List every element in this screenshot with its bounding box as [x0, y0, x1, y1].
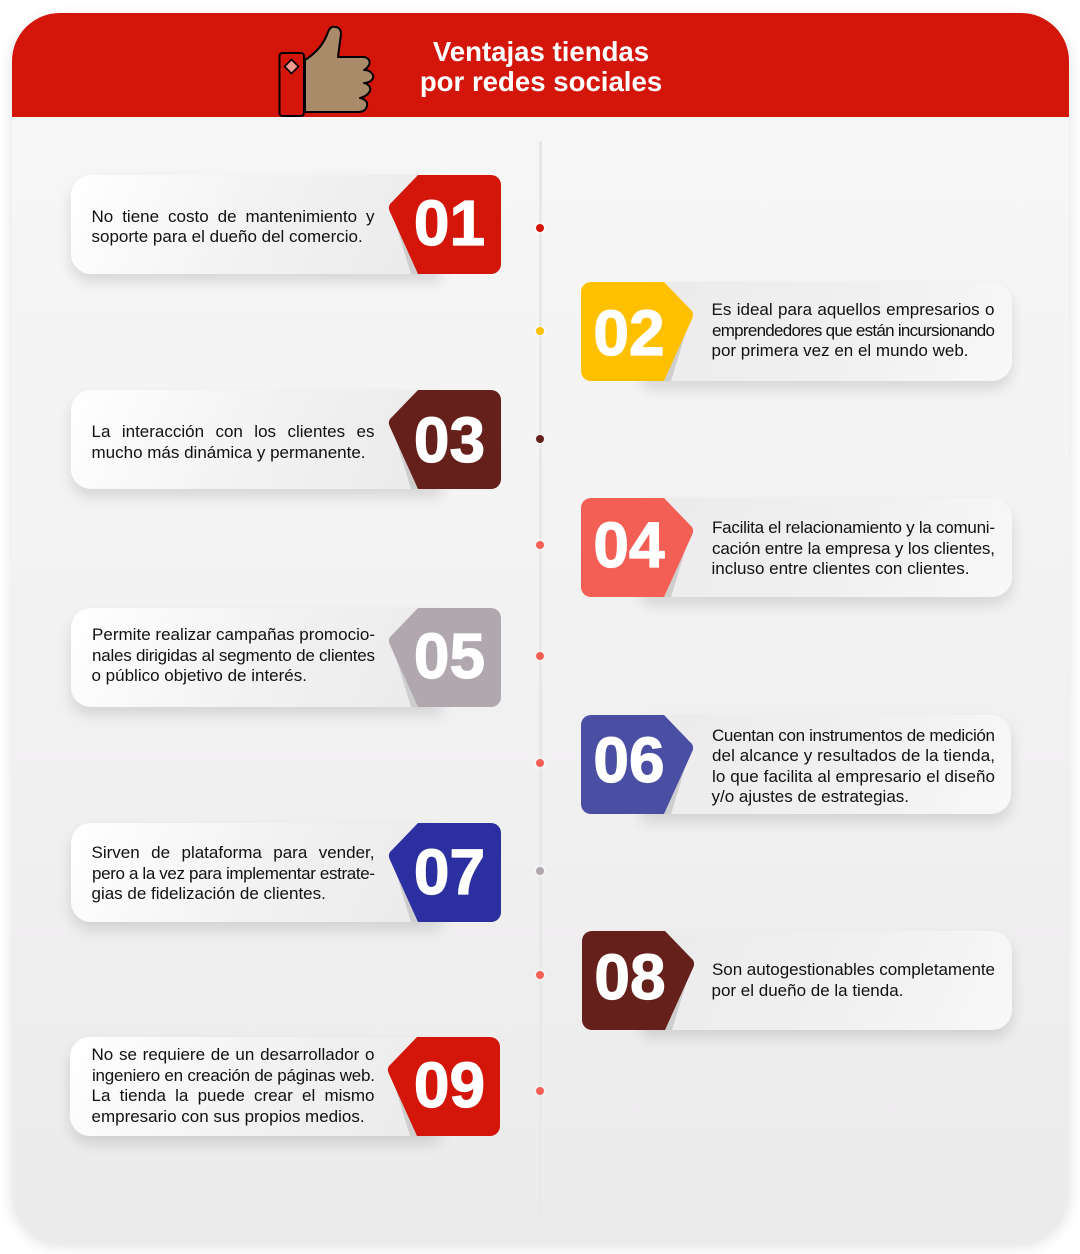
text 08: por el dueño de la tienda. — [712, 980, 903, 1000]
timeline dot 04 — [536, 541, 544, 549]
card 02 — [581, 282, 1016, 393]
card 07 — [67, 823, 501, 934]
timeline dot 09 — [536, 1087, 544, 1095]
card 09 — [66, 1037, 500, 1148]
text 06: Cuentan con instrumentos de medición — [712, 726, 994, 744]
badge 04 — [581, 498, 694, 597]
card 05 — [67, 608, 501, 719]
text 05: nales dirigidas al segmento de clientes — [92, 646, 374, 664]
badge 01 — [388, 175, 501, 274]
timeline dot 05 — [536, 652, 544, 660]
title: Ventajas tiendas — [433, 36, 649, 67]
text 09: ingeniero en creación de páginas web. — [92, 1066, 374, 1084]
card 04 — [581, 498, 1016, 609]
badge 07 — [388, 823, 501, 922]
timeline axis — [539, 141, 542, 1218]
badge 06 — [581, 715, 694, 814]
badge 02 — [581, 282, 694, 381]
number 03: 03 — [414, 404, 485, 476]
text 06 — [712, 726, 994, 806]
badge 05 — [388, 608, 501, 707]
text 02: por primera vez en el mundo web. — [712, 341, 969, 360]
timeline dot 01 — [536, 224, 544, 232]
header band — [12, 13, 1069, 117]
text 04: Facilita el relacionamiento y la comuni- — [712, 518, 994, 537]
text 06: del alcance y resultados de la tienda, — [712, 746, 994, 765]
text 07: gias de fidelización de clientes. — [92, 884, 326, 903]
text 01: soporte para el dueño del comercio. — [92, 227, 363, 246]
text 03: mucho más dinámica y permanente. — [92, 442, 366, 462]
badge 08 — [582, 931, 694, 1030]
text 09: La tienda la puede crear el mismo — [92, 1086, 374, 1105]
number 08: 08 — [594, 941, 666, 1013]
text 04: cación entre la empresa y los clientes, — [712, 538, 994, 558]
number 09: 09 — [414, 1049, 485, 1121]
timeline dot 03 — [536, 435, 544, 443]
timeline dot 08 — [536, 971, 544, 979]
text 07 — [92, 843, 374, 903]
number 06: 06 — [593, 724, 665, 796]
number 01: 01 — [414, 187, 485, 259]
number 07: 07 — [414, 836, 485, 908]
text 07: Sirven de plataforma para vender, — [92, 843, 374, 862]
card 03 — [67, 390, 501, 501]
timeline dot 06 — [536, 759, 544, 767]
card 08 — [582, 931, 1016, 1042]
text 07: pero a la vez para implementar estrate- — [92, 864, 374, 882]
text 02 — [712, 300, 994, 360]
text 01: No tiene costo de mantenimiento y — [92, 206, 374, 226]
text 04 — [712, 518, 994, 578]
number 04: 04 — [593, 509, 665, 581]
number 05: 05 — [414, 620, 485, 692]
number 02: 02 — [593, 297, 665, 369]
text 09: empresario con sus propios medios. — [92, 1106, 365, 1126]
text 04: incluso entre clientes con clientes. — [712, 559, 969, 578]
title — [420, 36, 662, 97]
text 06: y/o ajustes de estrategias. — [712, 787, 909, 806]
text 05 — [92, 625, 374, 685]
card 01 — [67, 175, 501, 286]
text 05: Permite realizar campañas promocio- — [92, 625, 374, 644]
text 02: emprendedores que están incursionando — [712, 320, 994, 340]
text 06: lo que facilita al empresario el diseño — [712, 766, 994, 786]
timeline dot 07 — [536, 867, 544, 875]
text 02: Es ideal para aquellos empresarios o — [712, 300, 994, 319]
badge 09 — [388, 1037, 500, 1136]
text 08: Son autogestionables completamente — [712, 960, 994, 979]
text 09: No se requiere de un desarrollador o — [92, 1045, 374, 1064]
title: por redes sociales — [420, 66, 662, 96]
card 06 — [581, 715, 1015, 826]
text 09 — [92, 1045, 374, 1126]
text 01 — [92, 206, 374, 246]
icon: thumbs up — [278, 26, 374, 117]
badge 03 — [388, 390, 501, 489]
text 03 — [92, 422, 374, 462]
text 05: o público objetivo de interés. — [92, 666, 307, 685]
text 08 — [712, 960, 994, 1000]
text 03: La interacción con los clientes es — [92, 422, 374, 441]
timeline dot 02 — [536, 327, 544, 335]
